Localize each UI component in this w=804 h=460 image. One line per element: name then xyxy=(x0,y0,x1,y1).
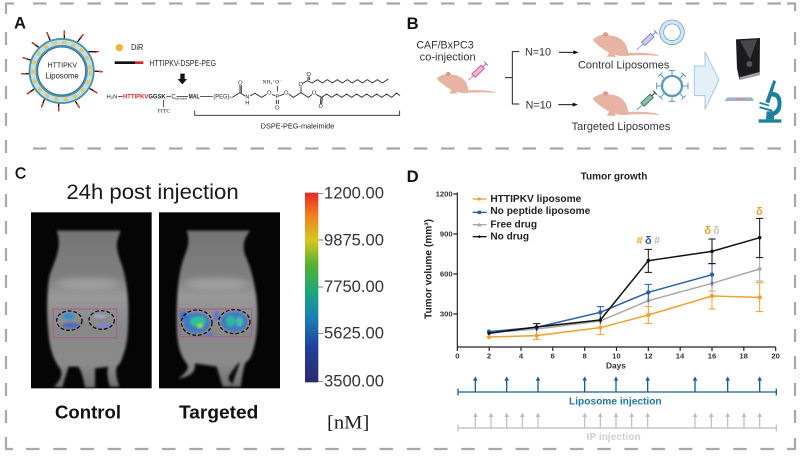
axes: 12 xyxy=(644,351,653,360)
axes: 1200 xyxy=(436,190,453,199)
icon: imaging system xyxy=(736,38,760,80)
text: Targeted Liposomes: Targeted Liposomes xyxy=(572,121,671,133)
legend: No peptide liposome xyxy=(490,206,591,217)
panel label A: A xyxy=(14,14,26,33)
line chart: tumor volume xyxy=(423,190,780,371)
axes: 0 xyxy=(455,351,459,360)
group label: N=10 top xyxy=(525,47,579,59)
legend: HTTIPKV-DSPE-PEG xyxy=(115,59,216,68)
colour scale: 9875.00 xyxy=(324,230,384,249)
series: HTTIPKV liposome xyxy=(487,283,763,340)
axes: 6 xyxy=(551,351,555,360)
group label: N=10 bottom: N=10 xyxy=(526,99,552,111)
icon: tissue slide xyxy=(724,97,754,101)
chemical structure: (PEG)ₙ xyxy=(213,95,232,101)
text: CAF/BxPC3 co-injection: CAF/BxPC3 xyxy=(416,40,474,52)
group label: N=10 top: N=10 xyxy=(525,47,551,59)
icon: mouse with pink syringe xyxy=(437,62,495,94)
axes: 14 xyxy=(676,351,685,360)
label: Control: Control xyxy=(55,402,121,423)
icon: control liposome xyxy=(660,20,684,45)
panel A: liposome design xyxy=(14,14,400,130)
colour scale: 7750.00 xyxy=(324,277,384,296)
text: CAF/BxPC3 co-injection: co-injection xyxy=(420,52,476,64)
significance marks: δ xyxy=(713,225,720,237)
chemical structure: GGSK xyxy=(148,94,166,100)
timeline: IP injection xyxy=(458,413,776,443)
axes: 20 xyxy=(771,351,780,360)
chemical structure: NH₄⁺O⁻ xyxy=(263,79,282,85)
bracket split xyxy=(505,52,519,104)
colour scale: 5625.00 xyxy=(324,324,384,343)
label: Targeted: Targeted xyxy=(179,402,258,423)
axes: 16 xyxy=(708,351,716,360)
legend: HTTIPKV-DSPE-PEG: HTTIPKV-DSPE-PEG xyxy=(149,59,216,68)
timeline: liposome injection: Liposome injection xyxy=(569,397,662,408)
axes: 300 xyxy=(440,310,453,319)
chemical structure: FITC xyxy=(158,109,171,115)
series: free drug xyxy=(489,255,763,333)
chemical structure: O xyxy=(275,105,280,111)
icon: targeted syringe xyxy=(637,91,657,110)
significance marks: # xyxy=(637,235,643,247)
chemical structure: O xyxy=(238,81,243,87)
chemical structure: H₂N xyxy=(107,95,117,101)
colour scale: 3500.00 xyxy=(324,371,384,390)
arrow: to analysis xyxy=(694,52,719,109)
axes: Days xyxy=(606,361,626,371)
text: CAF/BxPC3 co-injection xyxy=(416,40,476,64)
significance marks xyxy=(637,206,763,247)
timeline: liposome injection xyxy=(458,376,776,408)
legend: DiR xyxy=(116,43,144,52)
axes: 2 xyxy=(487,351,491,360)
chemical structure: O xyxy=(312,91,317,97)
icon: HTTIPKV liposome: Liposome xyxy=(45,72,79,81)
bracket: DSPE-PEG-maleimide: DSPE-PEG-maleimide xyxy=(261,121,334,130)
legend: Free drug xyxy=(490,220,537,231)
unit label: nM: [nM] xyxy=(327,412,369,433)
icon: targeted mouse xyxy=(593,91,659,116)
axes xyxy=(423,190,780,371)
bracket: DSPE-PEG-maleimide xyxy=(195,111,400,130)
timeline: IP injection: IP injection xyxy=(587,432,641,443)
chemical structure: (amide) xyxy=(175,97,187,101)
colour scale: 1200.00 xyxy=(324,183,384,202)
chemical structure: O xyxy=(298,82,303,88)
chemical structure xyxy=(107,72,400,115)
chemical structure: O xyxy=(267,90,272,96)
image: targeted mouse xyxy=(159,212,280,388)
panel label B: B xyxy=(407,14,419,33)
panel C: fluorescence imaging xyxy=(15,166,384,433)
icon: microscope xyxy=(759,80,782,123)
chemical structure: C xyxy=(171,94,176,100)
icon: HTTIPKV liposome: HTTIPKV xyxy=(48,61,78,70)
significance marks: δ xyxy=(756,206,763,218)
panel label C: C xyxy=(15,166,26,183)
group label: N=10 bottom xyxy=(526,99,578,111)
image: control mouse xyxy=(31,212,152,388)
axes: 18 xyxy=(739,351,749,360)
panel B: study design xyxy=(407,14,782,133)
axes: 900 xyxy=(440,230,453,239)
icon: targeted liposome xyxy=(657,71,688,101)
icon: control mouse xyxy=(593,32,659,57)
legend xyxy=(473,194,591,243)
legend: DiR: DiR xyxy=(131,43,144,52)
panel D: tumor growth xyxy=(407,167,780,443)
series: no peptide liposome xyxy=(487,264,716,335)
heading: 24h post injection: 24h post injection xyxy=(66,180,239,204)
chemical structure: O xyxy=(318,104,323,110)
chemical structure: N xyxy=(245,94,249,100)
significance marks: # xyxy=(654,235,660,247)
axes: 10 xyxy=(612,351,621,360)
axes: 4 xyxy=(519,351,524,360)
chemical structure: O xyxy=(284,90,289,96)
chemical structure: MAL xyxy=(189,94,200,100)
series: no drug xyxy=(487,218,763,335)
icon: control syringe xyxy=(637,30,658,50)
axes: Tumor volume (mm³) xyxy=(423,219,434,319)
significance marks: δ xyxy=(645,235,652,247)
legend: No drug xyxy=(490,232,529,243)
chemical structure: H xyxy=(245,100,249,106)
chemical structure: P xyxy=(275,95,279,101)
colour scale xyxy=(305,183,384,390)
icon: HTTIPKV liposome xyxy=(22,31,102,111)
legend: HTTIPKV liposome xyxy=(490,194,582,205)
chemical structure: HTTIPKV xyxy=(123,94,148,100)
axes: 600 xyxy=(440,270,453,279)
significance marks: δ xyxy=(704,225,711,237)
text: Control Liposomes: Control Liposomes xyxy=(578,59,670,71)
axes: 8 xyxy=(583,351,588,360)
panel label D: D xyxy=(407,167,419,186)
chemical structure: O xyxy=(306,72,311,78)
chart title: Tumor growth xyxy=(581,172,647,183)
arrow: down to structure xyxy=(178,74,187,84)
